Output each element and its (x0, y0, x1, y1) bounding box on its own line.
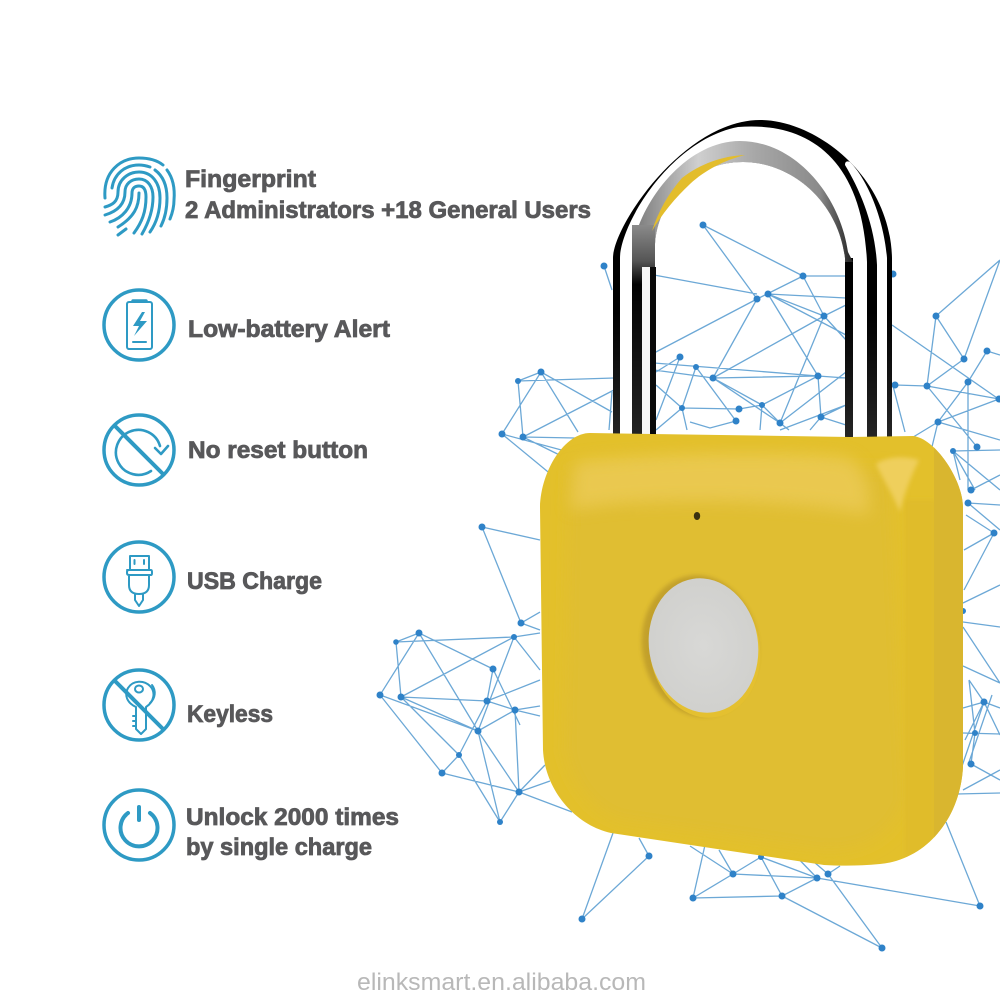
padlock body (540, 433, 970, 870)
chart: network background (376, 222, 1000, 952)
fingerprint sensor recess (632, 567, 768, 725)
icon: battery in circle (104, 290, 174, 360)
body shading (565, 440, 970, 870)
text: keyless: Keyless (187, 701, 273, 728)
network lines (380, 225, 1000, 948)
icon: fingerprint (105, 158, 174, 235)
text: fingerprint: Fingerprint (185, 166, 316, 193)
illustration: padlock (540, 120, 970, 870)
black base (613, 120, 892, 440)
indicator hole (694, 512, 700, 520)
front face (878, 482, 879, 483)
left leg inner edge (650, 267, 656, 436)
shoulder highlight (876, 457, 919, 512)
yellow reflection (652, 155, 745, 231)
text: usb charge: USB Charge (187, 568, 322, 595)
icon: usb plug (104, 542, 174, 612)
left leg dark stripe (632, 284, 642, 440)
text: low battery: Low-battery Alert (188, 316, 390, 343)
top glow (570, 453, 869, 515)
highlight on right shoulder (845, 161, 887, 440)
watermark: elinksmart.en.alibaba.com (357, 969, 646, 996)
fingerprint sensor (639, 570, 768, 721)
right side (907, 836, 936, 857)
body outline (540, 433, 963, 866)
gray inner band (632, 141, 853, 262)
main white band (620, 126, 867, 440)
right edge panel (934, 448, 963, 838)
left leg white stripe (642, 267, 650, 436)
text: unlock times: by single charge (186, 834, 372, 861)
text: unlock times: Unlock 2000 times (186, 804, 399, 831)
text: fingerprint (185, 166, 591, 224)
icon: no key (104, 670, 174, 740)
icon: no reset (104, 415, 174, 485)
padlock shackle (613, 120, 892, 440)
text: fingerprint: 2 Administrators +18 General Users (185, 197, 591, 224)
recess inner lip (640, 574, 770, 726)
network nodes (376, 222, 1000, 952)
left leg shading (632, 225, 655, 285)
title: feature list text (185, 166, 591, 861)
icon: power button (104, 790, 174, 860)
text: unlock times (186, 804, 399, 861)
text: no reset: No reset button (188, 437, 368, 464)
